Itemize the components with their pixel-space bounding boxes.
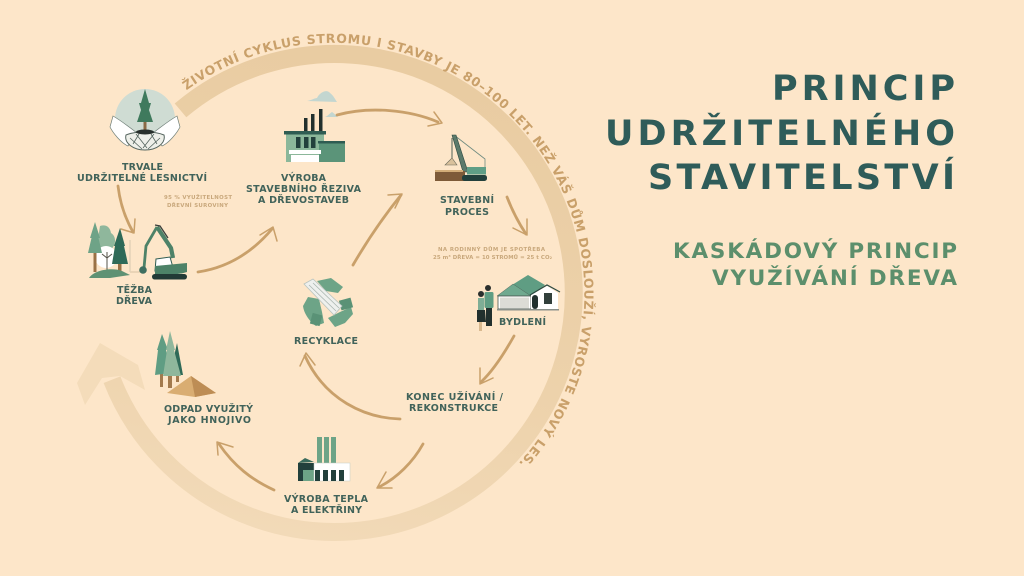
label: těžba dřeva: DŘEVA [116, 295, 153, 307]
label: stavební proces: PROCES [445, 207, 489, 218]
big cycle arrow [77, 54, 574, 532]
icon: trees and wood chips [155, 331, 216, 397]
note: využitelnost: 95 % VYUŽITELNOST [164, 193, 232, 201]
label: trvale udržitelné lesnictví [77, 162, 207, 184]
arrow: konec užívání to výroba tepla [377, 444, 423, 488]
icon: crane [435, 135, 487, 181]
note: spotřeba dřeva: 25 m³ DŘEVA = 10 STROMŮ = 25 t CO₂ [433, 254, 553, 261]
subtitle: VYUŽÍVÁNÍ DŘEVA [712, 265, 957, 291]
arrow: lesnictví to těžba [118, 186, 135, 233]
label: těžba dřeva [116, 284, 153, 307]
title [605, 69, 955, 198]
arrow: těžba to výroba [198, 227, 277, 272]
subtitle [673, 238, 957, 291]
arrow: bydlení to konec užívání [480, 336, 514, 384]
label: konec užívání: KONEC UŽÍVÁNÍ / [406, 391, 504, 403]
label: výroba stavebního řeziva: STAVEBNÍHO ŘEZIVA [246, 183, 362, 195]
title: PRINCIP [772, 69, 955, 109]
circular caption: ŽIVOTNÍ CYKLUS STROMU I STAVBY JE 80–100 LET. NEŽ VÁŠ DŮM DOSLOUŽÍ, VYROSTE NOVÝ LES. [182, 34, 596, 464]
label: stavební proces: STAVEBNÍ [440, 194, 494, 206]
label: stavební proces [440, 194, 494, 218]
label: výroba tepla a elektřiny: VÝROBA TEPLA [284, 493, 369, 505]
icon: heat and power plant [298, 437, 350, 481]
label: konec užívání: REKONSTRUKCE [409, 403, 498, 414]
note: využitelnost: DŘEVNÍ SUROVINY [167, 201, 228, 209]
label: výroba stavebního řeziva [246, 172, 362, 206]
label: trvale udržitelné lesnictví: UDRŽITELNÉ LESNICTVÍ [77, 172, 207, 184]
label: recyklace: RECYKLACE [294, 336, 358, 347]
title: STAVITELSTVÍ [648, 156, 955, 198]
title: UDRŽITELNÉHO [605, 112, 955, 154]
label: bydlení: BYDLENÍ [499, 316, 546, 328]
label: výroba tepla a elektřiny: A ELEKTŘINY [291, 504, 362, 516]
icon: family and house [477, 275, 560, 331]
arrow: recyklace to výroba [353, 194, 402, 265]
label: těžba dřeva: TĚŽBA [117, 284, 153, 296]
icon: hands holding tree [110, 89, 180, 150]
label: odpad využitý jako hnojivo: JAKO HNOJIVO [167, 415, 251, 426]
label: výroba tepla a elektřiny [284, 493, 369, 516]
label: výroba stavebního řeziva: A DŘEVOSTAVEB [258, 194, 349, 206]
label: odpad využitý jako hnojivo [164, 403, 253, 426]
note: spotřeba dřeva: NA RODINNÝ DŮM JE SPOTŘEBA [438, 246, 546, 253]
label: odpad využitý jako hnojivo: ODPAD VYUŽITÝ [164, 403, 253, 415]
arrow: stavební proces to bydlení [507, 197, 527, 235]
label: výroba stavebního řeziva: VÝROBA [281, 172, 327, 184]
icon: sawmill factory [284, 91, 345, 162]
arrow: výroba to stavební proces [337, 110, 442, 126]
note: spotřeba dřeva [433, 246, 553, 261]
label: konec užívání [406, 391, 504, 414]
arrow: výroba tepla to odpad [217, 442, 274, 490]
icon: forest and excavator [88, 222, 187, 280]
note: využitelnost [164, 193, 232, 209]
label: trvale udržitelné lesnictví: TRVALE [122, 162, 163, 173]
icon: recycling [303, 278, 353, 327]
arrow: konec užívání to recyklace [300, 353, 400, 419]
subtitle: KASKÁDOVÝ PRINCIP [673, 238, 957, 264]
